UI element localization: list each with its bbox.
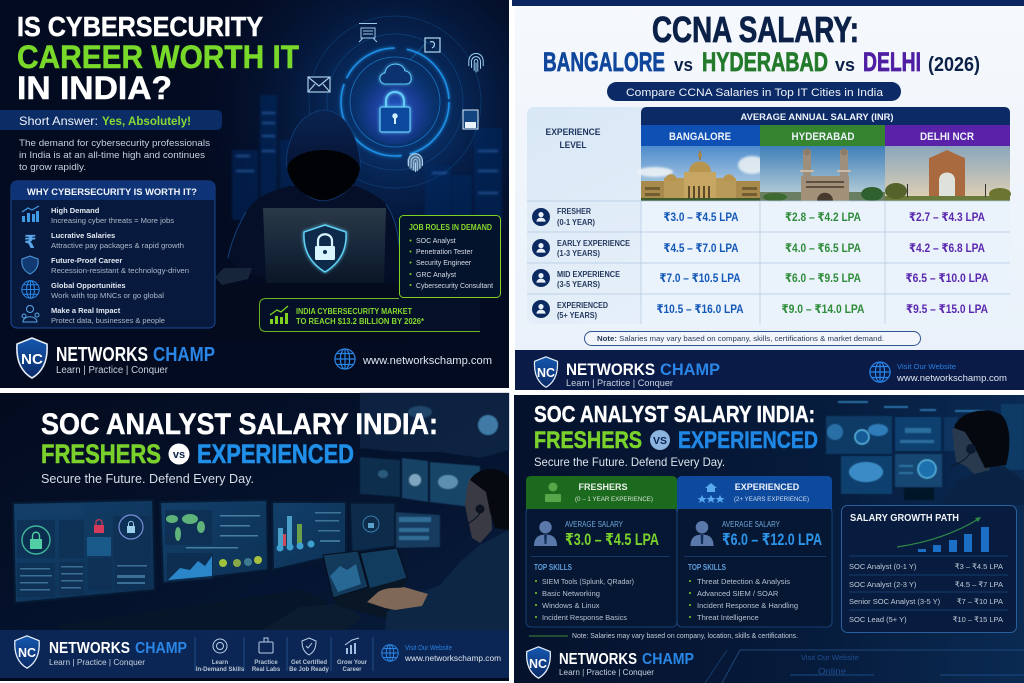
row: early experience: ₹4.5 – ₹7.0 LPA [664, 241, 739, 255]
item: global opportunities: Work with top MNCs or go global [51, 291, 164, 300]
panel: job roles: Cybersecurity Consultant [416, 283, 493, 290]
feature: grow: Grow Your [337, 660, 368, 666]
title: EXPERIENCED [197, 439, 354, 469]
card: experienced: EXPERIENCED [735, 482, 800, 492]
grid lines [527, 201, 1010, 324]
operator [941, 410, 1024, 505]
header: bangalore [641, 125, 760, 146]
row: mid experience: ₹6.5 – ₹10.0 LPA [906, 271, 989, 285]
item: future-proof career [22, 256, 189, 275]
header: average annual salary: AVERAGE ANNUAL SALARY (INR) [740, 112, 894, 123]
panel: job roles: SOC Analyst [416, 238, 456, 245]
intro paragraph [19, 138, 210, 173]
icon: person [690, 521, 714, 546]
row: fresher: (0-1 YEAR) [557, 218, 595, 227]
footer [515, 350, 1024, 390]
salary table [527, 107, 1011, 324]
row: mid experience: ₹6.0 – ₹9.5 LPA [785, 271, 861, 285]
row: soc lead: ₹10 – ₹15 LPA [953, 615, 1003, 624]
item: future-proof career: Recession-resistant & technology-driven [51, 266, 189, 275]
title [17, 11, 299, 106]
title: SOC ANALYST SALARY INDIA: [534, 401, 815, 427]
website: Visit Our Website [897, 362, 956, 371]
website [870, 362, 1007, 383]
row: senior analyst [849, 597, 1003, 606]
website: www.networkschamp.com [404, 653, 501, 663]
website: Visit Our Website [801, 653, 859, 662]
logo [534, 357, 720, 388]
feature: certified: Get Certified [291, 660, 327, 666]
intro paragraph: The demand for cybersecurity professionals [19, 138, 210, 149]
title: IS CYBERSECURITY [17, 11, 263, 42]
card: freshers: ₹3.0 – ₹4.5 LPA [565, 531, 659, 549]
image: charminar [760, 146, 885, 201]
header: experience level [546, 127, 600, 151]
row: analyst 2-3: ₹4.5 – ₹7 LPA [955, 580, 1003, 589]
title: CCNA SALARY: [652, 9, 859, 50]
logo: networks champ: NC [21, 351, 43, 368]
item: real impact: Protect data, businesses & people [51, 316, 165, 325]
row: soc lead [849, 615, 1003, 624]
monitor centre [160, 500, 268, 583]
row: experienced [532, 300, 988, 320]
item: global opportunities: Global Opportunities [51, 281, 126, 290]
icon: cloud [380, 64, 411, 84]
feature: grow [337, 638, 368, 673]
icon: person [534, 521, 557, 546]
monitor far [350, 503, 395, 552]
logo: NC [18, 645, 37, 660]
logo: CHAMP [660, 360, 720, 379]
intro paragraph: to grow rapidly. [19, 162, 86, 173]
icon: fresher [545, 482, 561, 502]
title: (2026) [928, 54, 980, 76]
card: experienced: ₹6.0 – ₹12.0 LPA [722, 531, 822, 549]
item: real impact: Make a Real Impact [51, 306, 121, 315]
icon: fingerprint right [469, 54, 483, 72]
card: freshers: SIEM Tools (Splunk, QRadar) [542, 577, 634, 586]
title: BANGALORE [543, 47, 665, 77]
feature: practice: Practice [254, 660, 278, 666]
row: senior analyst: Senior SOC Analyst (3-5 Y) [849, 597, 941, 606]
card: freshers [526, 476, 677, 627]
header: experience level: LEVEL [560, 140, 587, 151]
icon: stars [698, 483, 724, 503]
row: experienced: ₹9.5 – ₹15.0 LPA [906, 302, 988, 316]
subtitle pill: Compare CCNA Salaries in Top IT Cities in India [626, 87, 884, 99]
card: experienced: Incident Response & Handling [697, 601, 798, 610]
title: DELHI [863, 47, 921, 77]
operator [367, 469, 509, 630]
card: experienced: Threat Detection & Analysis [697, 577, 790, 586]
title [543, 9, 980, 77]
title: SOC ANALYST SALARY INDIA: [41, 408, 438, 441]
panel: job roles: Security Engineer [416, 260, 472, 267]
website link [335, 349, 492, 369]
panel: job roles [400, 216, 500, 298]
vs badge [650, 430, 670, 450]
vs badge: vs [173, 449, 185, 461]
row: analyst 0-1: SOC Analyst (0-1 Y) [849, 562, 917, 571]
panel: why cybersecurity [11, 181, 215, 328]
icon: device [463, 110, 478, 129]
title: FRESHERS [534, 427, 642, 454]
tagline: Secure the Future. Defend Every Day. [534, 455, 725, 469]
icon: laptop shield [304, 225, 346, 272]
bar chart [897, 517, 989, 552]
vs badge [168, 444, 190, 464]
item: high demand: High Demand [51, 206, 100, 215]
panel: soc analyst hero [0, 393, 509, 681]
card: freshers: Incident Response Basics [542, 613, 627, 622]
item: high demand [22, 206, 174, 225]
footer [527, 647, 1024, 683]
panel: job roles: GRC Analyst [416, 272, 456, 279]
logo [527, 647, 694, 678]
website: Visit Our Website [405, 645, 452, 652]
row: analyst 2-3 [849, 580, 1003, 589]
background screens [826, 401, 1024, 500]
row: analyst 2-3: SOC Analyst (2-3 Y) [849, 580, 917, 589]
panel: ccna salary [512, 0, 1024, 390]
header: experience level: EXPERIENCE [546, 127, 600, 138]
logo: CHAMP [642, 651, 694, 668]
item: future-proof career: Future-Proof Career [51, 256, 122, 265]
card: freshers: FRESHERS [578, 482, 628, 492]
header: delhi ncr [885, 125, 1010, 146]
icon: screen [359, 24, 377, 42]
laptop [263, 208, 386, 283]
title [41, 408, 438, 469]
row: senior analyst: ₹7 – ₹10 LPA [957, 597, 1003, 606]
panel: market callout: TO REACH $13.2 BILLION BY 2026* [296, 317, 425, 326]
card: freshers: TOP SKILLS [534, 563, 573, 572]
header: delhi ncr: DELHI NCR [920, 131, 974, 143]
icon: growth chart [270, 306, 288, 324]
item: lucrative salaries [24, 231, 184, 252]
panel: salary growth path [842, 506, 1016, 632]
card: freshers: (0 – 1 YEAR EXPERIENCE) [575, 496, 653, 503]
header: hyderabad: HYDERABAD [792, 131, 855, 143]
row: experienced: (5+ YEARS) [557, 311, 597, 320]
title: vs [835, 55, 855, 75]
panel: salary growth path: SALARY GROWTH PATH [850, 512, 959, 524]
HUD rings [309, 16, 481, 188]
hooded figure [228, 110, 400, 278]
logo: networks champ: NETWORKS [56, 343, 148, 366]
desk [205, 283, 402, 340]
note: Note: Salaries may vary based on company, location, skills & certifications. [572, 633, 798, 640]
title [534, 401, 818, 454]
title: FRESHERS [41, 439, 161, 469]
panel: why cybersecurity: WHY CYBERSECURITY IS WORTH IT? [27, 187, 197, 198]
feature: learn [196, 639, 245, 673]
row: early experience: ₹4.0 – ₹6.5 LPA [785, 241, 861, 255]
website [382, 645, 501, 663]
row: mid experience [532, 269, 989, 289]
panel: job roles: Penetration Tester [416, 249, 473, 256]
row: mid experience: ₹7.0 – ₹10.5 LPA [660, 271, 741, 285]
item: lucrative salaries: Attractive pay packages & rapid growth [51, 241, 184, 250]
item: real impact [22, 306, 165, 325]
card: experienced: Threat Intelligence [697, 613, 759, 622]
monitor right [272, 502, 346, 570]
card: freshers: Windows & Linux [542, 601, 600, 610]
row: fresher: ₹3.0 – ₹4.5 LPA [664, 210, 739, 224]
icon: fingerprint lower [407, 153, 423, 172]
vs badge: VS [653, 435, 667, 447]
feature: certified: Be Job Ready [289, 667, 329, 673]
logo: NETWORKS [566, 360, 655, 379]
feature: practice [252, 638, 281, 673]
logo: Learn | Practice | Conquer [49, 657, 145, 667]
logo: NC [529, 656, 548, 671]
item: global opportunities [22, 281, 164, 300]
logo: NETWORKS [559, 651, 637, 668]
logo [15, 636, 187, 668]
panel: market callout [260, 298, 480, 332]
row: analyst 0-1: ₹3 – ₹4.5 LPA [955, 562, 1003, 571]
row: early experience: (1-3 YEARS) [557, 249, 600, 258]
title: IN INDIA? [17, 70, 172, 106]
website: www.networkschamp.com [896, 373, 1007, 383]
panel: market callout: INDIA CYBERSECURITY MARKET [296, 307, 412, 316]
intro paragraph: in India is at an all-time high and continues [19, 150, 205, 161]
tagline: Secure the Future. Defend Every Day. [41, 471, 254, 486]
feature: learn: In-Demand Skills [196, 667, 245, 673]
logo: networks champ: Learn | Practice | Conquer [56, 365, 169, 376]
card: freshers: AVERAGE SALARY [565, 520, 624, 529]
short answer bar: Short Answer: [19, 114, 98, 128]
logo: networks champ [17, 338, 215, 378]
row: fresher: FRESHER [557, 207, 591, 216]
icon: central padlock [380, 92, 410, 132]
row: experienced: ₹10.5 – ₹16.0 LPA [656, 302, 744, 316]
row: soc lead: SOC Lead (5+ Y) [849, 615, 907, 624]
card: experienced [677, 476, 832, 627]
panel: is cybersecurity worth it [0, 0, 509, 388]
header: hyderabad [760, 125, 885, 146]
title: EXPERIENCED [678, 427, 818, 454]
row: fresher: ₹2.7 – ₹4.3 LPA [909, 210, 985, 224]
row: early experience: ₹4.2 – ₹6.8 LPA [909, 241, 985, 255]
row: analyst 0-1 [849, 562, 1003, 571]
row: early experience [532, 239, 985, 258]
card: experienced: AVERAGE SALARY [722, 520, 781, 529]
card: experienced: TOP SKILLS [688, 563, 727, 572]
short answer bar [0, 110, 222, 130]
note pill: Note: Salaries may vary based on company, skills, certifications & market demand. [597, 334, 884, 343]
card: experienced: (2+ YEARS EXPERIENCE) [734, 496, 809, 503]
header: bangalore: BANGALORE [669, 131, 731, 143]
row: experienced: ₹9.0 – ₹14.0 LPA [782, 302, 865, 316]
subtitle pill [607, 82, 901, 101]
monitor left [13, 500, 155, 603]
item: high demand: Increasing cyber threats = More jobs [51, 216, 174, 225]
title: CAREER WORTH IT [17, 39, 299, 75]
website [801, 653, 859, 676]
city skyline backdrop [232, 95, 502, 228]
footer band [0, 630, 509, 681]
logo: Learn | Practice | Conquer [559, 667, 654, 677]
note pill [584, 332, 920, 346]
row: fresher: ₹2.8 – ₹4.2 LPA [785, 210, 861, 224]
keyboard [262, 603, 362, 630]
feature: certified [289, 638, 329, 673]
feature: grow: Career [342, 667, 362, 673]
card: freshers: Basic Networking [542, 589, 600, 598]
row: early experience: EARLY EXPERIENCE [557, 239, 631, 248]
item: lucrative salaries: Lucrative Salaries [51, 231, 115, 240]
item: lucrative salaries: ₹ [24, 232, 37, 252]
website link: www.networkschamp.com [362, 355, 492, 367]
feature: practice: Real Labs [252, 667, 281, 673]
card: experienced: Advanced SIEM / SOAR [697, 589, 779, 598]
feature: learn: Learn [212, 660, 229, 666]
header: average annual salary [641, 107, 1010, 125]
row: mid experience: (3-5 YEARS) [557, 280, 600, 289]
logo: NETWORKS [49, 640, 130, 657]
logo: NC [537, 366, 555, 380]
row: fresher [532, 207, 985, 227]
short answer bar: Yes, Absolutely! [102, 114, 191, 128]
desk [60, 590, 345, 630]
phone on desk [215, 268, 252, 285]
background wall screens [360, 393, 509, 548]
image: india gate [885, 146, 1011, 201]
logo: CHAMP [135, 640, 187, 657]
icon: tablet [425, 38, 440, 52]
laptops [323, 548, 407, 618]
logo: Learn | Practice | Conquer [566, 378, 673, 388]
panel: soc analyst comparison [514, 395, 1024, 683]
row: mid experience: MID EXPERIENCE [557, 270, 621, 279]
image: vidhana soudha [637, 146, 766, 201]
title: vs [674, 55, 693, 75]
logo: networks champ: CHAMP [153, 343, 215, 366]
title: HYDERABAD [702, 47, 828, 77]
website: Online [818, 667, 847, 676]
panel: job roles: JOB ROLES IN DEMAND [409, 223, 492, 232]
row: experienced: EXPERIENCED [557, 301, 608, 310]
icon: envelope [308, 77, 330, 92]
